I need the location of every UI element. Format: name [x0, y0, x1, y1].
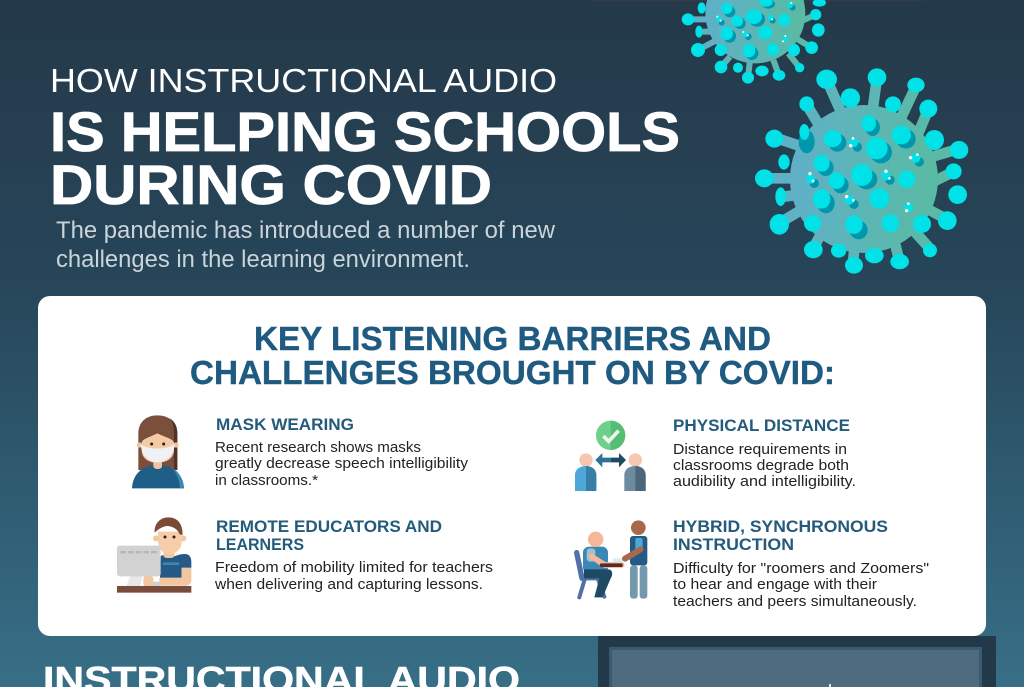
icon: remote educator at computer	[117, 517, 191, 593]
panel heading	[190, 320, 835, 391]
panel: screen frame	[598, 636, 996, 687]
title	[50, 62, 680, 216]
icon: physical distance	[575, 421, 646, 491]
icon: large virus	[755, 68, 968, 274]
text: physical distance	[673, 416, 856, 490]
text: mask wearing: MASK WEARING	[216, 415, 354, 434]
text: physical distance: audibility and intelligibility.	[673, 474, 856, 490]
panel heading: CHALLENGES BROUGHT ON BY COVID:	[190, 354, 835, 391]
text: physical distance: PHYSICAL DISTANCE	[673, 416, 850, 435]
text: hybrid synchronous instruction: INSTRUCTION	[673, 535, 794, 554]
text: mask wearing	[215, 415, 469, 489]
text: hybrid synchronous instruction: teachers and peers simultaneously.	[673, 594, 917, 610]
text: remote educators and learners	[214, 517, 493, 593]
text: physical distance: classrooms degrade both	[673, 458, 849, 474]
title: HOW INSTRUCTIONAL AUDIO	[50, 62, 557, 99]
title: DURING COVID	[50, 153, 492, 216]
icon: small virus	[682, 0, 826, 84]
subtitle: The pandemic has introduced a number of new	[56, 217, 556, 244]
text: mask wearing: Recent research shows masks	[215, 440, 421, 456]
panel heading: KEY LISTENING BARRIERS AND	[254, 320, 771, 357]
icon: hybrid instruction teacher and student	[577, 520, 647, 599]
text: hybrid synchronous instruction: to hear and engage with their	[673, 577, 877, 593]
text: hybrid synchronous instruction	[673, 517, 929, 610]
text: remote educators and learners: REMOTE EDUCATORS AND	[216, 517, 442, 536]
text: remote educators and learners: Freedom of mobility limited for teachers	[215, 560, 493, 576]
text: mask wearing: greatly decrease speech intelligibility	[215, 456, 469, 472]
text: remote educators and learners: LEARNERS	[216, 535, 304, 554]
panel: key listening barriers	[38, 296, 986, 636]
text: hybrid synchronous instruction: HYBRID, SYNCHRONOUS	[673, 517, 888, 536]
icon: woman wearing mask	[132, 415, 184, 488]
subtitle: challenges in the learning environment.	[56, 246, 470, 273]
text: hybrid synchronous instruction: Difficulty for "roomers and Zoomers"	[673, 561, 929, 577]
title: IS HELPING SCHOOLS	[50, 100, 680, 163]
text: remote educators and learners: when delivering and capturing lessons.	[214, 577, 483, 593]
text: mask wearing: in classrooms.*	[215, 473, 318, 489]
subtitle	[56, 217, 556, 273]
text: physical distance: Distance requirements in	[673, 442, 847, 458]
